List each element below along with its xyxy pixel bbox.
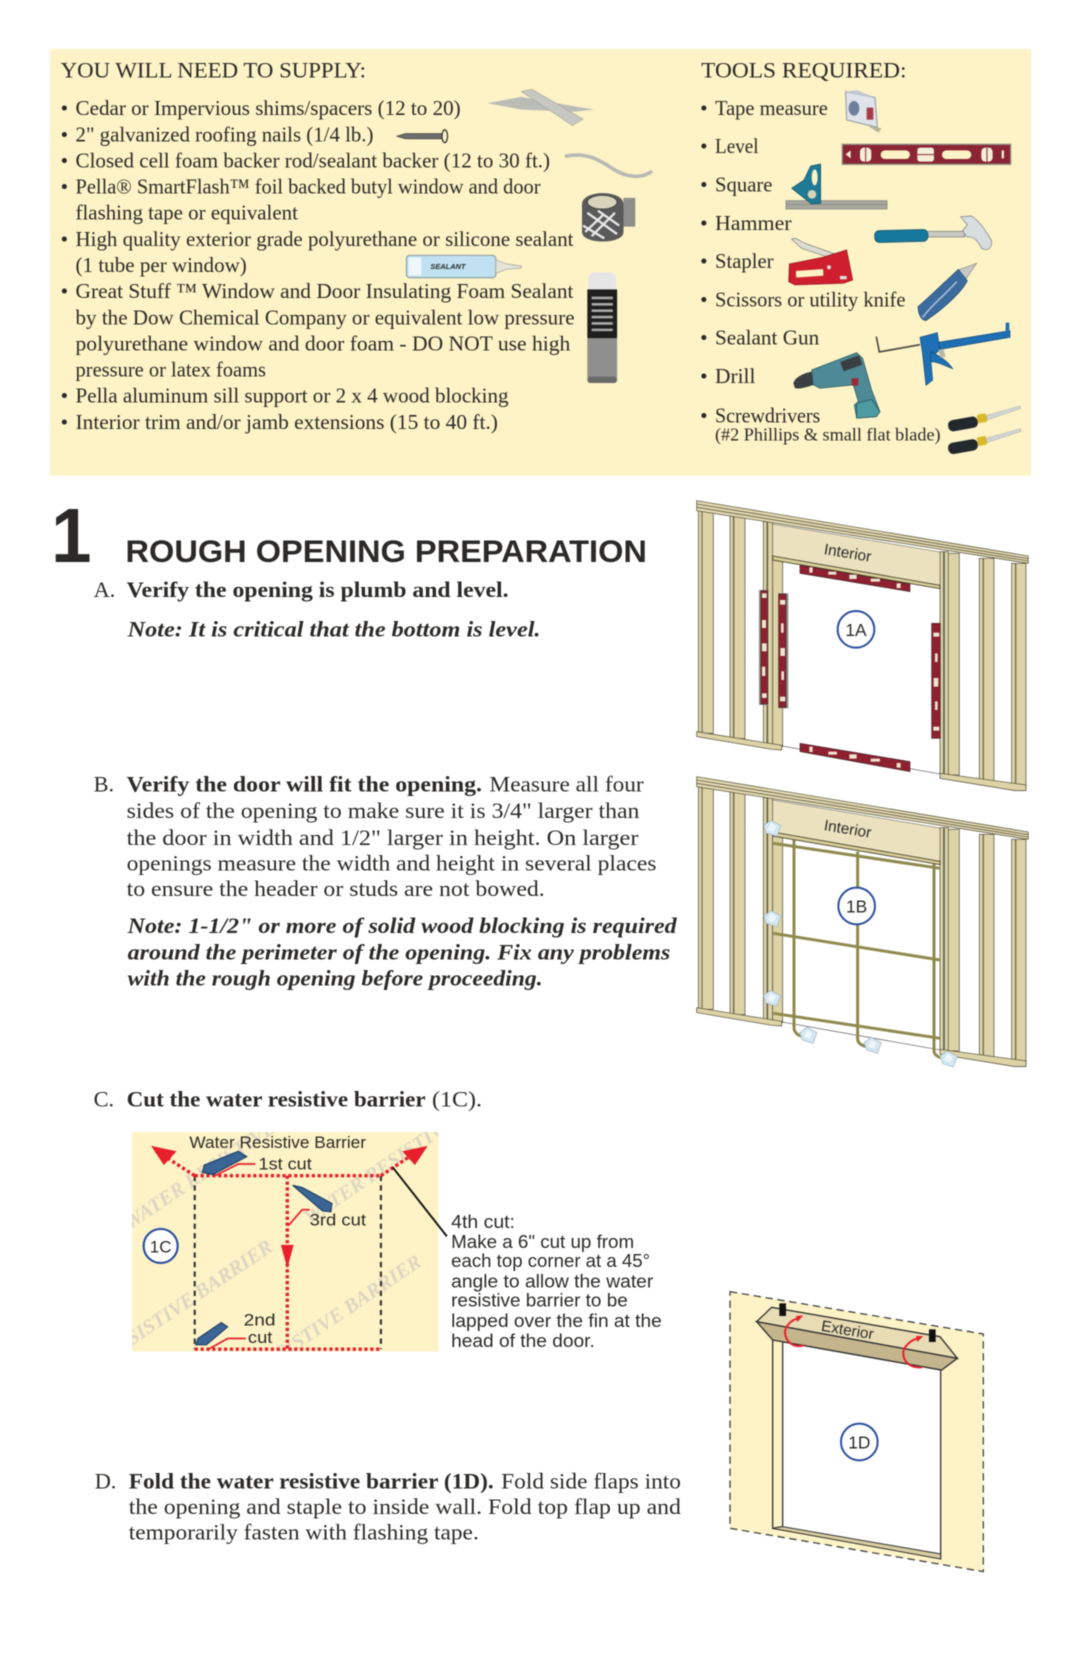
list: supplies [61, 96, 575, 434]
step A: Note: It is critical that the bottom is level. [127, 616, 541, 641]
icon: drill [793, 353, 880, 418]
label: interior: Interior [823, 541, 873, 566]
list: tools: • [700, 364, 708, 388]
icon: shims [487, 89, 594, 126]
text: 4th cut note: each top corner at a 45° [451, 1251, 650, 1271]
step D: D. [95, 1469, 116, 1494]
title: water resistive barrier: Water Resistive Barrier [189, 1133, 366, 1152]
sill [773, 1527, 941, 1559]
arrowheads [151, 1146, 428, 1268]
icon: roofing nail [397, 130, 448, 143]
panel: materials and tools [50, 49, 1031, 476]
text: 4th cut note: head of the door. [451, 1331, 595, 1351]
list: tools: Level [715, 134, 759, 158]
list: tools: • [700, 287, 708, 311]
diagram 1B: string grid on framing [697, 777, 1028, 1067]
text: 4th cut note: lapped over the fin at the [451, 1311, 662, 1331]
icon: staple gun [789, 238, 853, 285]
badge 1B: 1B [846, 897, 867, 917]
section 1 text [51, 494, 681, 1545]
text: 4th cut note [451, 1212, 662, 1351]
diagram 1A: levels on framing [697, 501, 1028, 791]
step B: openings measure the width and height in several places [127, 850, 656, 875]
label: exterior: Exterior [820, 1318, 875, 1343]
step D: Fold the water resistive barrier (1D). [129, 1469, 494, 1494]
step number: 1 [51, 494, 92, 579]
barrier sheet [730, 1292, 983, 1572]
step C: (1C). [432, 1087, 482, 1112]
diagram 1D: folded barrier [730, 1292, 983, 1572]
step B: Verify the door will fit the opening. [127, 772, 482, 797]
list: supplies: 2" galvanized roofing nails (1/4 lb.) [76, 123, 373, 147]
folded top flap [757, 1307, 957, 1370]
step B: sides of the opening to make sure it is 3/4" larger than [127, 798, 639, 823]
callout: 1st cut: 1st cut [259, 1154, 312, 1173]
heading: you will need to supply: YOU WILL NEED TO SUPPLY: [61, 58, 366, 83]
list: supplies: • [61, 175, 68, 199]
text: 4th cut note: 4th cut: [451, 1212, 515, 1232]
list: tools: Hammer [715, 211, 792, 235]
leader line: 4th cut [393, 1167, 447, 1236]
list: supplies: (1 tube per window) [76, 253, 247, 277]
heading: rough opening preparation: ROUGH OPENING PREPARATION [126, 533, 647, 569]
step B: with the rough opening before proceeding. [128, 965, 543, 990]
list: supplies: • [61, 227, 68, 251]
tool icons [786, 90, 1021, 455]
list: tools: • [700, 173, 708, 197]
fold arrows [785, 1315, 923, 1367]
callout: 3rd cut [288, 1185, 366, 1230]
string grid [773, 840, 943, 1058]
step B: to ensure the header or studs are not bowed. [127, 876, 545, 901]
dashed door outline [162, 1154, 413, 1349]
step A: Verify the opening is plumb and level. [127, 577, 509, 602]
staples [779, 1303, 936, 1342]
icon: combination square [786, 164, 887, 209]
text: 4th cut note: Make a 6" cut up from [451, 1232, 634, 1252]
level vials [762, 567, 939, 768]
list: supplies: polyurethane window and door foam - DO NOT use high [76, 332, 571, 356]
watermark text [132, 1132, 439, 1352]
watermark text: WATER RESISTIVE [300, 1111, 460, 1229]
badge 1A [838, 611, 874, 648]
diagram 1C: water resistive barrier cuts [131, 1132, 439, 1352]
icon: tape measure [846, 90, 882, 133]
watermark text: RESISTIVE BARRIER [99, 1236, 277, 1366]
list: tools: • [700, 134, 708, 158]
list: supplies: Great Stuff ™ Window and Door Insulating Foam Sealant [76, 279, 574, 303]
step A: A. [94, 577, 115, 602]
list: supplies: • [61, 123, 68, 147]
step B: the door in width and 1/2" larger in height. On larger [127, 825, 639, 850]
list: tools: Sealant Gun [715, 326, 820, 350]
callout: 1st cut [202, 1151, 312, 1176]
step C: C. [94, 1087, 114, 1112]
callout: 2nd cut: 2nd [244, 1311, 276, 1330]
icon: screwdrivers [947, 406, 1021, 455]
list: supplies: High quality exterior grade polyurethane or silicone sealant [76, 227, 574, 251]
list: supplies: • [61, 149, 68, 173]
text: 4th cut note: angle to allow the water [451, 1271, 653, 1291]
step D [95, 1469, 681, 1545]
list: supplies: Interior trim and/or jamb extensions (15 to 40 ft.) [76, 410, 498, 434]
step B: Note: 1-1/2" or more of solid wood blocking is required [127, 913, 678, 938]
icon: sealant tube [406, 255, 521, 278]
list: supplies: • [61, 384, 68, 408]
watermark text: WATER RESISTIVE [120, 1117, 280, 1234]
icon: sealant tube: SEALANT [430, 262, 467, 271]
icon: foam can [587, 272, 617, 383]
badge 1C: 1C [150, 1237, 172, 1256]
list: tools: Stapler [715, 249, 774, 273]
icon: caulking gun [876, 323, 1010, 385]
list: supplies: • [61, 410, 68, 434]
list: tools: Scissors or utility knife [715, 287, 905, 311]
callout: 3rd cut: 3rd cut [310, 1211, 366, 1230]
icon: hammer [874, 216, 992, 250]
heading: tools required: TOOLS REQUIRED: [701, 58, 907, 83]
callout: 2nd cut: cut [248, 1328, 273, 1347]
left reveal [773, 1340, 783, 1528]
list: tools: • [700, 249, 708, 273]
badge 1B [838, 888, 875, 924]
callout: 2nd cut [196, 1311, 276, 1349]
list: supplies: pressure or latex foams [76, 358, 266, 382]
icon: utility knife [918, 263, 977, 321]
list: tools: Drill [715, 364, 756, 388]
list: tools: • [700, 403, 708, 427]
icon: level [842, 144, 1011, 164]
list: tools [700, 96, 941, 445]
icon: foam backer rod [565, 155, 652, 176]
step B: around the perimeter of the opening. Fix any problems [128, 940, 670, 965]
step C: Cut the water resistive barrier [127, 1087, 426, 1112]
step B: B. [94, 772, 114, 797]
badge 1C [144, 1229, 178, 1263]
icon: flashing tape roll [582, 193, 635, 242]
list: supplies: • [61, 96, 68, 120]
badge 1D: 1D [848, 1433, 870, 1453]
list: tools: (#2 Phillips & small flat blade) [715, 424, 941, 445]
step D: temporarily fasten with flashing tape. [129, 1520, 479, 1545]
step D: the opening and staple to inside wall. Fold top flap up and [129, 1494, 681, 1519]
step B [94, 772, 678, 990]
list: supplies: flashing tape or equivalent [76, 201, 298, 225]
badge 1A: 1A [845, 620, 867, 640]
list: supplies: Cedar or Impervious shims/spacers (12 to 20) [76, 96, 461, 120]
label: interior: Interior [823, 817, 873, 842]
badge 1D [841, 1424, 878, 1460]
opening [773, 1340, 941, 1558]
levels [759, 565, 940, 772]
watermark text: RESISTIVE BARRIER [248, 1251, 426, 1380]
list: supplies: Pella® SmartFlash™ foil backed butyl window and door [76, 175, 541, 199]
step D: Fold side flaps into [501, 1469, 681, 1494]
text: 4th cut note: resistive barrier to be [451, 1291, 628, 1311]
list: tools: Tape measure [715, 96, 828, 120]
list: supplies: • [61, 279, 68, 303]
list: tools: Square [715, 173, 772, 197]
list: tools: • [700, 211, 708, 235]
list: supplies: Pella aluminum sill support or 2 x 4 wood blocking [76, 384, 509, 408]
step B: Measure all four [489, 772, 644, 797]
list: supplies: by the Dow Chemical Company or equivalent low pressure [76, 306, 575, 330]
shims [763, 820, 957, 1067]
list: tools: Screwdrivers [715, 403, 820, 427]
list: supplies: Closed cell foam backer rod/sealant backer (12 to 30 ft.) [76, 149, 550, 173]
step A [94, 577, 541, 641]
list: tools: • [700, 326, 708, 350]
list: tools: • [700, 96, 708, 120]
